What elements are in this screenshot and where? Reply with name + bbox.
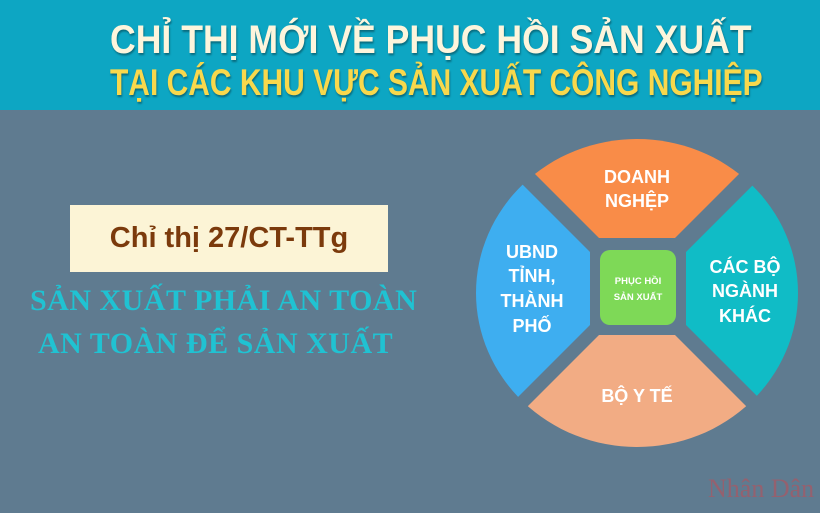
center: phuc hoi san xuat: SẢN XUẤT	[614, 291, 662, 303]
title line 1: CHỈ THỊ MỚI VỀ PHỤC HỒI SẢN XUẤT	[110, 18, 752, 62]
slogan line 1: SẢN XUẤT PHẢI AN TOÀN	[30, 284, 417, 317]
center: phuc hoi san xuat	[600, 250, 676, 325]
segment: doanh nghiep	[535, 139, 739, 238]
segment: cac bo nganh: KHÁC	[719, 305, 771, 326]
slogan line 2: AN TOÀN ĐỂ SẢN XUẤT	[38, 327, 393, 360]
directive box: Chỉ thị 27/CT-TTg	[110, 222, 348, 254]
segment: ubnd: PHỐ	[512, 315, 552, 336]
segment: ubnd: TỈNH,	[508, 265, 556, 286]
segment: doanh nghiep: DOANH	[604, 167, 670, 187]
segment: bo y te: BỘ Y TẾ	[601, 385, 673, 406]
segment: bo y te	[528, 335, 746, 447]
segment: cac bo nganh: NGÀNH	[712, 280, 778, 301]
diagram	[476, 139, 798, 447]
title line 2: TẠI CÁC KHU VỰC SẢN XUẤT CÔNG NGHIỆP	[110, 62, 763, 103]
segment: doanh nghiep: NGHỆP	[605, 190, 669, 211]
segment: cac bo nganh: CÁC BỘ	[710, 256, 780, 277]
center: phuc hoi san xuat: PHỤC HỒI	[615, 275, 661, 287]
directive box	[70, 205, 388, 272]
segment: ubnd: THÀNH	[500, 290, 564, 311]
segment: ubnd	[476, 184, 590, 397]
segment: ubnd: UBND	[506, 242, 558, 262]
segment: cac bo nganh	[686, 186, 798, 396]
header band	[0, 0, 820, 110]
watermark: Nhân Dân	[708, 474, 814, 503]
